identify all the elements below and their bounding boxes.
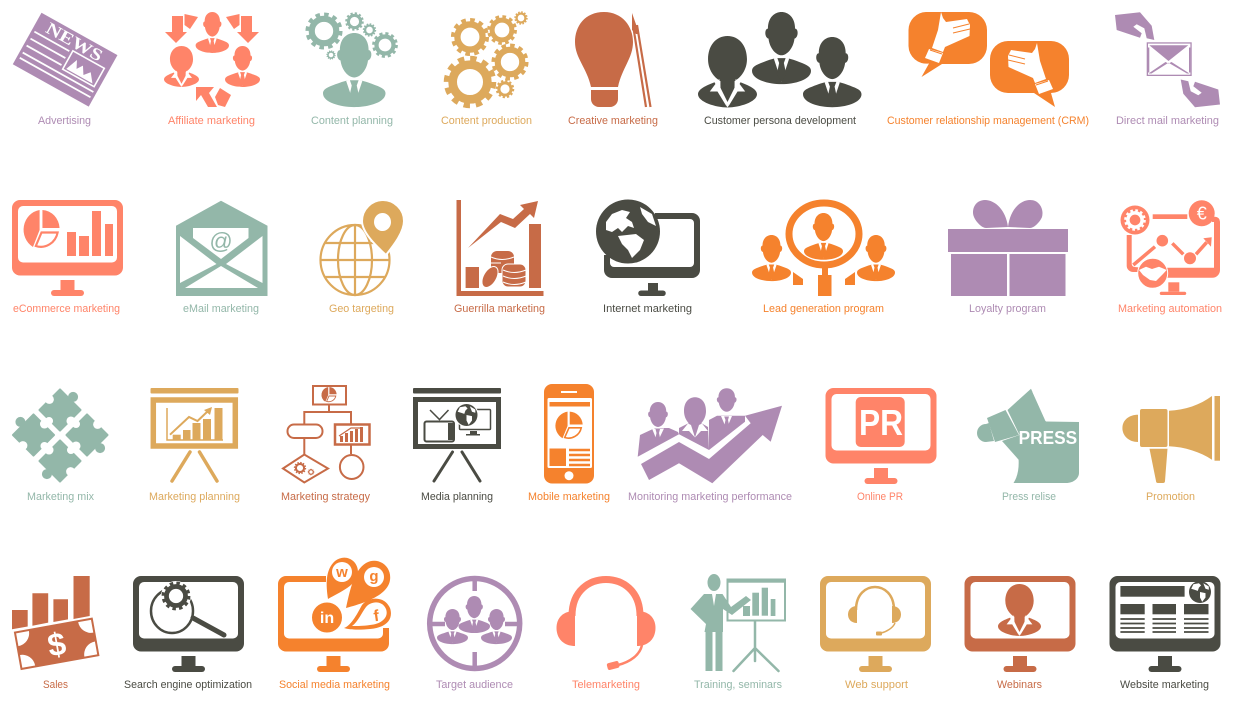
label: Advertising <box>38 115 91 127</box>
label: eCommerce marketing <box>13 303 120 315</box>
panel: Marketing mix <box>3 380 117 503</box>
panel: Customer persona development <box>698 12 862 127</box>
panel: Media planning <box>413 388 501 503</box>
panel: Monitoring marketing performance <box>628 388 792 503</box>
icon: monitor with woman <box>964 576 1076 672</box>
label: Content production <box>441 115 532 127</box>
panel: Web support <box>820 576 931 691</box>
icon: monitor with social bubbles: g <box>369 568 379 585</box>
icon: puzzle pieces <box>3 380 117 491</box>
icon: bars and banknote: $ <box>45 625 69 664</box>
icon: gears <box>447 12 527 105</box>
icon: monitor with PR tile: PR <box>859 402 903 443</box>
icon: monitor with magnifier <box>133 576 244 672</box>
icon: monitor with social bubbles: f <box>373 608 381 625</box>
label: Lead generation program <box>763 303 884 315</box>
label: Web support <box>845 679 908 691</box>
label: Online PR <box>857 491 903 503</box>
icon: crosshair with people <box>429 578 520 669</box>
label: Telemarketing <box>572 679 640 691</box>
label: Customer relationship management (CRM) <box>887 115 1089 127</box>
icon: presentation board <box>150 388 238 481</box>
label: Loyalty program <box>969 303 1046 315</box>
icon: monitor with headset <box>820 576 931 672</box>
label: Social media marketing <box>279 679 390 691</box>
panel: Mobile marketing <box>528 384 610 503</box>
panel: Customer relationship management (CRM) <box>887 12 1089 127</box>
icon: monitor with charts <box>12 200 123 296</box>
icon: globe and pin <box>320 200 404 295</box>
panel: Training, seminars <box>690 574 785 691</box>
panel: Search engine optimization <box>124 576 252 691</box>
panel: Website marketing <box>1110 576 1220 691</box>
icon: flowchart <box>283 386 370 482</box>
panel: eMail marketing <box>176 201 268 315</box>
label: Geo targeting <box>329 303 394 315</box>
label: Internet marketing <box>603 303 692 315</box>
panel: Marketing planning <box>149 388 240 503</box>
panel: Target audience <box>429 578 520 691</box>
label: Monitoring marketing performance <box>628 491 792 503</box>
icon: megaphone with paper: PRESS <box>1019 427 1077 448</box>
label: Promotion <box>1146 491 1195 503</box>
panel: Loyalty program <box>948 200 1068 315</box>
panel: Webinars <box>964 576 1076 691</box>
panel: Content production <box>441 12 532 127</box>
panel: Advertising <box>13 13 117 127</box>
icon: automation monitor: € <box>1197 204 1207 224</box>
icon: megaphone <box>1122 396 1220 483</box>
icon: monitor with social bubbles: w <box>335 564 348 581</box>
icon: trainer at board <box>690 574 785 671</box>
label: eMail marketing <box>183 303 259 315</box>
icon: headset <box>556 580 656 670</box>
label: Marketing automation <box>1118 303 1222 315</box>
panel: Marketing automation <box>1118 200 1222 315</box>
icon: monitor with social bubbles: in <box>320 610 334 627</box>
icon: people and rising arrow <box>638 388 782 483</box>
panel: Lead generation program <box>752 203 895 315</box>
panel: Affiliate marketing <box>164 12 260 127</box>
panel: Internet marketing <box>596 200 700 315</box>
icon: head with gears <box>307 13 396 107</box>
panel: Online PR <box>826 388 936 503</box>
icon: light bulb and pencil <box>575 12 650 107</box>
label: Marketing strategy <box>281 491 370 503</box>
label: Press relise <box>1002 491 1056 503</box>
label: Guerrilla marketing <box>454 303 545 315</box>
label: Marketing mix <box>27 491 94 503</box>
icon: people with arrows <box>164 12 260 107</box>
icon: monitor with globe <box>596 200 700 296</box>
icon: monitor with social bubbles <box>278 558 396 672</box>
label: Webinars <box>997 679 1042 691</box>
label: Creative marketing <box>568 115 658 127</box>
label: Training, seminars <box>694 679 782 691</box>
label: Search engine optimization <box>124 679 252 691</box>
icon: chart with coins <box>456 200 544 296</box>
icon: monitor with web page <box>1110 576 1220 672</box>
label: Media planning <box>421 491 493 503</box>
icon: newspaper: NEWS <box>43 19 106 65</box>
panel: Geo targeting <box>320 200 404 315</box>
panel: Content planning <box>307 13 396 127</box>
panel: Guerrilla marketing <box>454 200 545 315</box>
panel: Direct mail marketing <box>1115 12 1220 127</box>
panel: Telemarketing <box>556 580 656 691</box>
icon: gift box <box>948 200 1068 296</box>
icon: speech bubbles with hands <box>908 12 1069 107</box>
icon: envelope and hands <box>1115 12 1220 107</box>
panel: Social media marketing <box>278 558 396 691</box>
icon: open envelope: @ <box>209 228 233 254</box>
label: Affiliate marketing <box>168 115 255 127</box>
label: Marketing planning <box>149 491 240 503</box>
label: Direct mail marketing <box>1116 115 1219 127</box>
panel: eCommerce marketing <box>12 200 123 315</box>
panel: Press relise <box>977 389 1079 503</box>
panel: Marketing strategy <box>281 386 370 503</box>
icon: three people <box>698 12 862 108</box>
icon: smartphone <box>544 384 594 484</box>
label: Content planning <box>311 115 393 127</box>
label: Mobile marketing <box>528 491 610 503</box>
icon: magnifier with people <box>752 203 895 296</box>
panel: Sales <box>12 576 100 691</box>
icon: presentation board with tv <box>413 388 501 481</box>
panel: Promotion <box>1122 396 1220 503</box>
panel: Creative marketing <box>568 12 658 127</box>
label: Website marketing <box>1120 679 1209 691</box>
label: Target audience <box>436 679 513 691</box>
label: Customer persona development <box>704 115 856 127</box>
label: Sales <box>43 679 68 691</box>
